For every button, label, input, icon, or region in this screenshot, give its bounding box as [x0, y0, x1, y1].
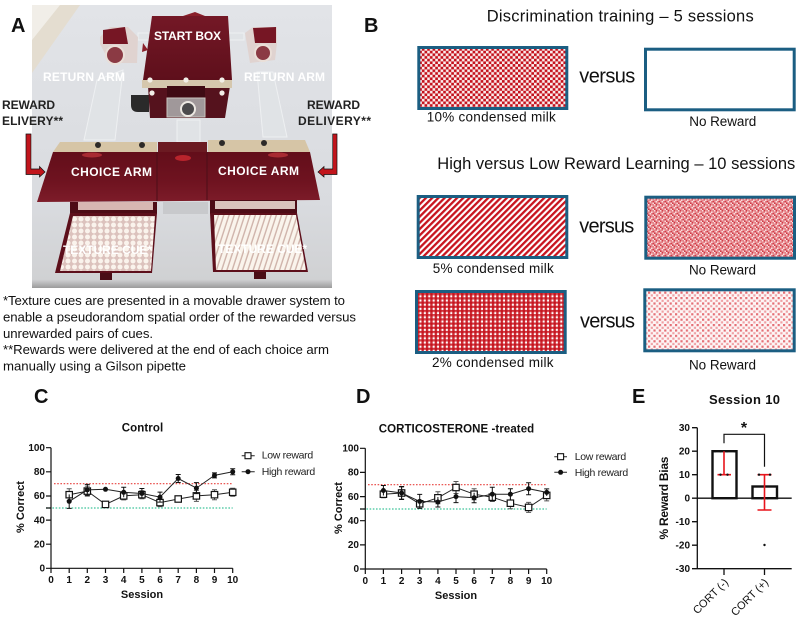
choice arm box	[37, 140, 320, 214]
left texture drawer	[55, 202, 157, 280]
footnotes: unrewarded pairs of cues.	[3, 326, 153, 341]
y tick labels	[342, 444, 359, 575]
y tick labels: 10	[679, 470, 690, 481]
panel letter E: E	[632, 386, 645, 408]
y tick labels	[676, 423, 690, 575]
versus: versus	[579, 216, 634, 238]
axes	[46, 448, 233, 573]
y tick labels: 100	[28, 443, 45, 454]
legend: Low reward	[575, 451, 626, 463]
significance bracket	[724, 434, 764, 467]
panel B: cue schedule	[364, 8, 795, 372]
y axis title: % Correct	[333, 482, 345, 534]
x tick labels: 5	[139, 575, 145, 586]
x tick labels: 7	[175, 575, 181, 586]
x tick labels: 5	[453, 576, 459, 587]
reward delivery label left	[2, 98, 63, 128]
reward delivery label right	[298, 98, 371, 128]
reference lines	[360, 485, 547, 509]
chart title: Session 10	[709, 392, 780, 407]
x tick labels: 1	[381, 576, 387, 587]
y tick labels: 20	[34, 540, 45, 550]
x tick labels: 2	[85, 575, 91, 586]
caption: no reward: No Reward	[689, 262, 756, 277]
data points	[714, 450, 771, 546]
x tick labels: 4	[435, 576, 441, 587]
axes	[692, 428, 792, 575]
x tick labels: 0	[48, 575, 54, 586]
x tick labels: 6	[157, 575, 163, 586]
legend: High reward	[575, 467, 628, 479]
footnotes	[3, 293, 356, 374]
right texture drawer	[210, 200, 308, 279]
axes	[360, 448, 547, 574]
x tick labels: 9	[526, 576, 532, 587]
x tick labels: 2	[399, 576, 405, 587]
y tick labels: 0	[684, 494, 690, 505]
x tick labels	[363, 576, 553, 587]
panel letter C: C	[34, 386, 48, 408]
y tick labels: 80	[348, 468, 359, 478]
cue: blank no reward	[646, 49, 794, 110]
legend	[554, 451, 628, 479]
cue: dense noise no reward	[646, 197, 794, 258]
x tick labels: 10	[227, 575, 239, 586]
versus: versus	[579, 66, 635, 88]
y tick labels: 0	[39, 564, 45, 574]
y tick labels: 0	[353, 564, 359, 575]
series: low reward	[66, 486, 236, 508]
x tick labels: 7	[490, 576, 496, 587]
reference lines	[46, 484, 233, 508]
caption: 2% condensed milk: 2% condensed milk	[432, 355, 554, 370]
y tick labels: 80	[34, 467, 45, 478]
chart title: CORTICOSTERONE -treated	[379, 424, 534, 436]
x axis title: Session	[435, 590, 477, 602]
photo of the maze apparatus	[32, 5, 332, 288]
series: high reward	[381, 483, 549, 508]
heading: high versus low reward learning: High versus Low Reward Learning – 10 sessions	[437, 155, 795, 173]
y tick labels: 20	[679, 447, 690, 458]
x tick labels: 3	[103, 575, 109, 586]
y tick labels: 100	[342, 444, 359, 454]
footnotes: *Texture cues are presented in a movable drawer system to	[3, 293, 345, 308]
cue: sparse dots no reward	[645, 290, 794, 351]
x tick labels: 4	[121, 575, 127, 586]
legend: Low reward	[262, 450, 313, 462]
y tick labels: 60	[348, 492, 359, 503]
panel letter D: D	[356, 386, 370, 408]
series: high reward	[67, 469, 235, 508]
texture cue label left: TEXTURE CUE*	[63, 243, 152, 257]
arrow: reward delivery right	[318, 134, 337, 177]
x tick labels: CORT (-)	[691, 577, 731, 617]
footnotes: **Rewards were delivered at the end of each choice arm	[3, 342, 329, 357]
panel letter B: B	[364, 15, 378, 37]
error bars in red	[718, 451, 772, 510]
return arm label left: RETURN ARM	[43, 70, 125, 84]
footnotes: manually using a Gilson pipette	[3, 358, 186, 374]
significance star: *	[741, 420, 748, 437]
x tick labels: 9	[212, 575, 218, 586]
x tick labels: 8	[508, 576, 514, 587]
caption: no reward: No Reward	[689, 114, 756, 129]
y axis title: % Reward Bias	[657, 456, 671, 540]
x tick labels: 1	[66, 575, 72, 586]
start box label: START BOX	[154, 29, 221, 43]
chart title: Control	[122, 422, 163, 434]
x tick labels	[48, 575, 239, 586]
x tick labels	[691, 577, 771, 619]
cue: 10% condensed milk	[419, 48, 567, 108]
footnotes: enable a pseudorandom spatial order of the rewarded versus	[3, 310, 356, 324]
y axis title: % Correct	[15, 481, 27, 533]
choice arm label left: CHOICE ARM	[71, 165, 152, 179]
cue: 5% condensed milk	[418, 196, 567, 258]
y tick labels: -30	[676, 564, 690, 575]
reward delivery label right: REWARD	[307, 98, 360, 112]
legend	[242, 450, 315, 478]
texture cue label right: TEXTURE CUE*	[218, 242, 307, 256]
y tick labels: 40	[348, 516, 359, 527]
y tick labels: -20	[676, 541, 690, 552]
panel E: bar chart session 10	[632, 386, 792, 619]
panel C: control line chart	[15, 386, 315, 601]
left return cube	[100, 27, 138, 64]
x tick labels: 8	[194, 575, 200, 586]
x axis title: Session	[121, 589, 163, 601]
panel A: apparatus	[2, 5, 371, 374]
cue: 2% condensed milk	[416, 292, 565, 352]
x tick labels: 6	[471, 576, 477, 587]
heading: discrimination training: Discrimination training – 5 sessions	[487, 8, 754, 26]
y tick labels: 40	[34, 516, 45, 526]
y tick labels	[28, 443, 45, 574]
x tick labels: 3	[417, 576, 423, 587]
reward delivery label left: REWARD	[2, 98, 55, 112]
panel letter A: A	[11, 15, 25, 37]
caption: 5% condensed milk: 5% condensed milk	[433, 261, 554, 276]
caption: 10% condensed milk: 10% condensed milk	[427, 110, 556, 124]
panel D: corticosterone line chart	[333, 386, 628, 602]
start box	[131, 12, 232, 118]
choice arm label right: CHOICE ARM	[218, 164, 299, 178]
arrow: reward delivery left	[26, 134, 45, 177]
x tick labels: CORT (+)	[729, 577, 771, 619]
reward delivery label left: ELIVERY**	[2, 114, 63, 128]
x tick labels: 10	[541, 576, 553, 587]
y tick labels: 20	[348, 540, 359, 551]
y tick labels: 60	[34, 491, 45, 502]
return arm label right: RETURN ARM	[244, 70, 325, 84]
versus: versus	[580, 311, 635, 333]
reward delivery label right: DELIVERY**	[298, 114, 371, 128]
caption: no reward: No Reward	[689, 357, 756, 372]
series: low reward	[380, 482, 550, 512]
return arm tubes	[84, 33, 287, 142]
y tick labels: 30	[679, 423, 690, 434]
y tick labels: -10	[676, 517, 690, 528]
bars	[712, 451, 777, 498]
right return cube	[245, 27, 277, 63]
x tick labels: 0	[363, 576, 369, 587]
legend: High reward	[262, 466, 315, 478]
